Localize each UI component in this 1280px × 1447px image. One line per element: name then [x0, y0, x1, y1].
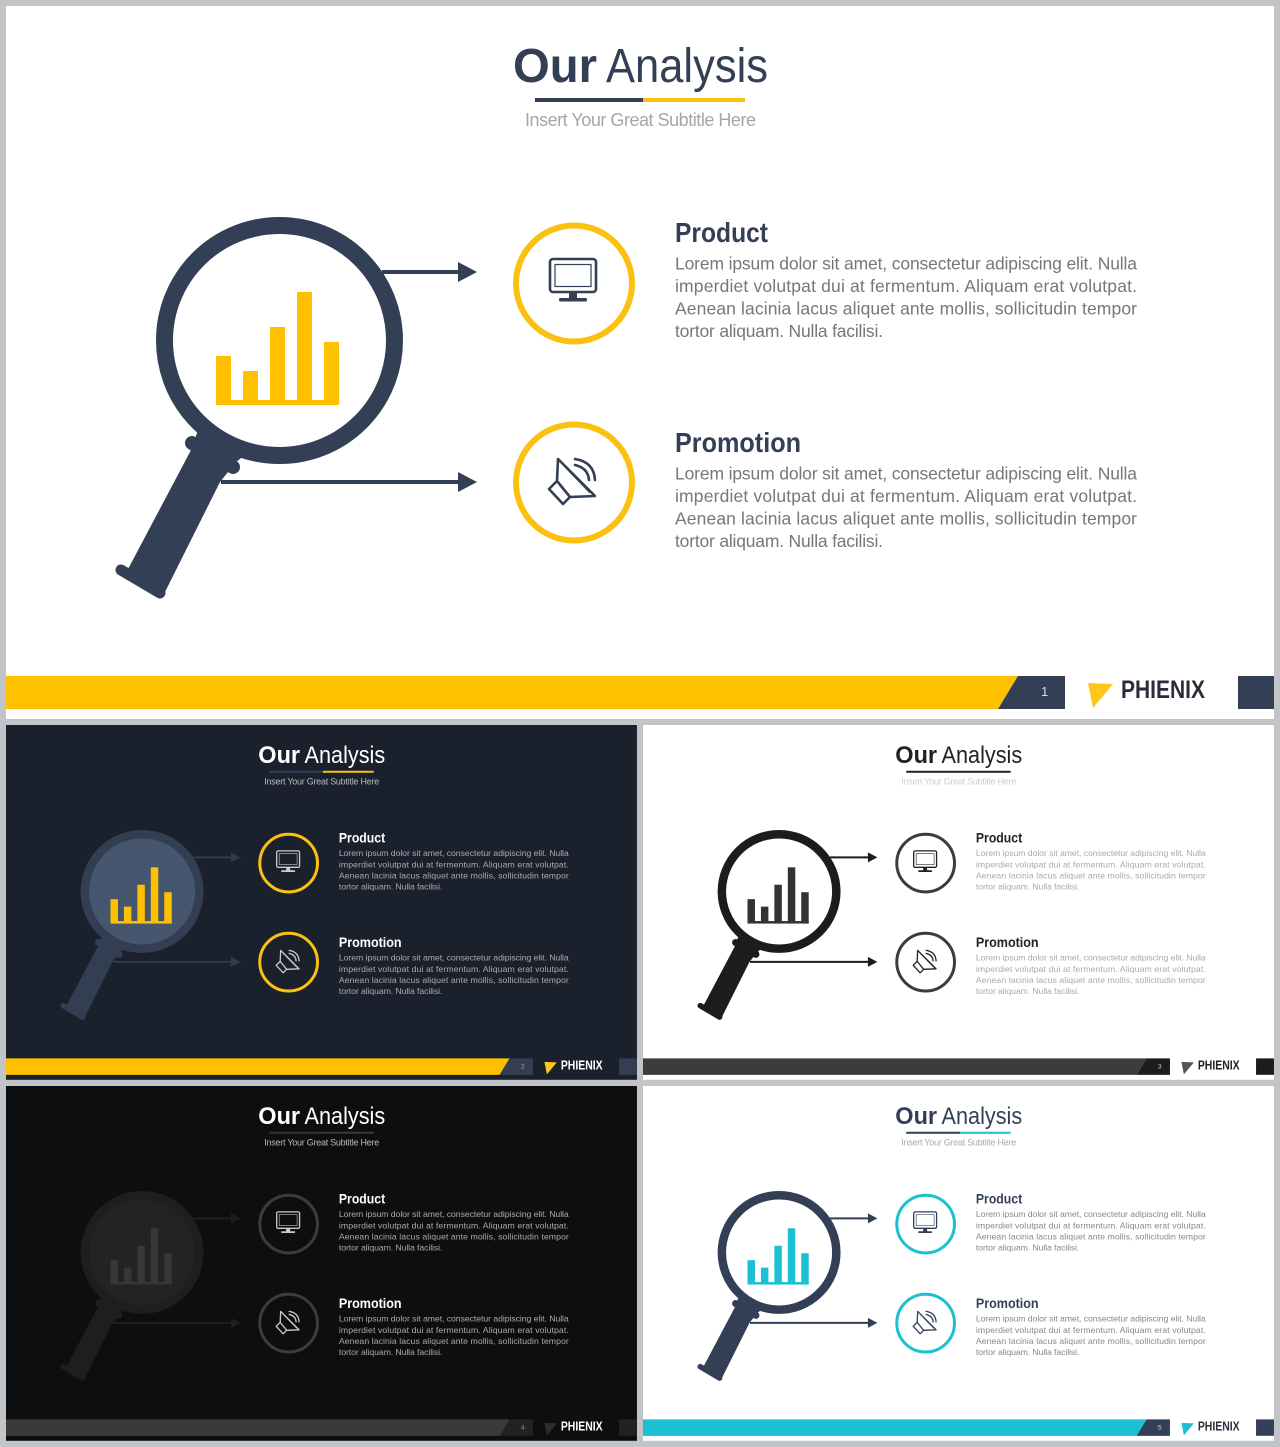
text block: promotion	[976, 953, 1206, 996]
title underline	[269, 1132, 374, 1134]
title: Analysis	[942, 742, 1022, 769]
title: Analysis	[942, 1103, 1022, 1130]
logo: PHIENIX	[1121, 676, 1205, 704]
text block: product	[339, 1209, 569, 1253]
text block: product	[976, 1209, 1206, 1253]
arrow to promotion	[750, 1318, 877, 1328]
icon: speaker in circle	[260, 933, 317, 991]
text block: product: imperdiet volutpat dui at fermentum. Aliquam erat volutpat.	[675, 276, 1137, 296]
title: Our	[895, 1103, 937, 1130]
footer bar	[6, 676, 1274, 709]
text block: product: Lorem ipsum dolor sit amet, consectetur adipiscing elit. Nulla	[976, 848, 1206, 858]
title	[513, 40, 768, 93]
bar chart	[216, 292, 339, 405]
heading: promotion: Promotion	[339, 1295, 402, 1311]
text block: promotion: Aenean lacinia lacus aliquet ante mollis, sollicitudin tempor	[339, 975, 569, 985]
text block: product: Lorem ipsum dolor sit amet, consectetur adipiscing elit. Nulla	[339, 848, 569, 858]
text block: promotion: tortor aliquam. Nulla facilisi.	[976, 986, 1079, 996]
text block: product: Aenean lacinia lacus aliquet ante mollis, sollicitudin tempor	[339, 871, 569, 881]
subtitle: Insert Your Great Subtitle Here	[264, 777, 379, 787]
text block: product: Aenean lacinia lacus aliquet ante mollis, sollicitudin tempor	[339, 1232, 569, 1242]
heading: promotion: Promotion	[339, 934, 402, 950]
logo	[544, 1058, 603, 1074]
heading: product: Product	[675, 217, 768, 248]
title: Our	[513, 40, 597, 93]
magnifying glass	[63, 834, 199, 1017]
text block: product: tortor aliquam. Nulla facilisi.	[339, 1243, 442, 1253]
magnifying glass	[700, 1195, 836, 1378]
footer bar	[6, 1419, 637, 1436]
arrow to promotion	[221, 472, 477, 492]
title underline	[269, 771, 374, 773]
text block: promotion	[976, 1314, 1206, 1357]
text block: product: Aenean lacinia lacus aliquet ante mollis, sollicitudin tempor	[976, 871, 1206, 881]
text block: promotion: imperdiet volutpat dui at fermentum. Aliquam erat volutpat.	[339, 964, 569, 974]
title: Our	[258, 742, 300, 769]
icon: monitor in circle	[260, 1195, 317, 1253]
text block: product: Lorem ipsum dolor sit amet, consectetur adipiscing elit. Nulla	[675, 254, 1137, 274]
page number: 5	[1158, 1424, 1162, 1431]
magnifying glass	[63, 1195, 199, 1378]
arrow to product	[382, 262, 477, 282]
icon: speaker in circle	[897, 933, 954, 991]
arrow to promotion	[113, 957, 240, 967]
subtitle: Insert Your Great Subtitle Here	[525, 110, 756, 130]
logo: PHIENIX	[1198, 1419, 1240, 1433]
title	[895, 742, 1022, 769]
text block: product	[976, 848, 1206, 892]
heading: product: Product	[976, 829, 1022, 845]
footer bar	[6, 1058, 637, 1075]
logo: PHIENIX	[561, 1419, 603, 1433]
title underline	[535, 98, 745, 102]
title: Analysis	[305, 1103, 385, 1130]
icon: speaker in circle	[516, 424, 632, 540]
text block: promotion	[339, 1314, 569, 1357]
slide 2: dark navy theme	[6, 725, 637, 1080]
text block: promotion: Lorem ipsum dolor sit amet, consectetur adipiscing elit. Nulla	[675, 464, 1137, 484]
icon: monitor in circle	[260, 834, 317, 892]
text block: promotion: Lorem ipsum dolor sit amet, consectetur adipiscing elit. Nulla	[976, 1314, 1206, 1324]
text block: promotion: imperdiet volutpat dui at fermentum. Aliquam erat volutpat.	[976, 1325, 1206, 1335]
text block: product: imperdiet volutpat dui at fermentum. Aliquam erat volutpat.	[339, 859, 569, 869]
title: Analysis	[606, 40, 768, 93]
text block: product: Aenean lacinia lacus aliquet ante mollis, sollicitudin tempor	[675, 298, 1137, 318]
text block: promotion: Lorem ipsum dolor sit amet, consectetur adipiscing elit. Nulla	[339, 1314, 569, 1324]
title: Our	[895, 742, 937, 769]
text block: product: imperdiet volutpat dui at fermentum. Aliquam erat volutpat.	[976, 859, 1206, 869]
text block: promotion: tortor aliquam. Nulla facilisi.	[339, 986, 442, 996]
bar chart	[110, 1228, 172, 1285]
arrow to promotion	[750, 957, 877, 967]
text block: promotion: Aenean lacinia lacus aliquet ante mollis, sollicitudin tempor	[339, 1336, 569, 1346]
title underline	[906, 1132, 1011, 1134]
slide 5: white and teal theme	[643, 1086, 1274, 1441]
text block: promotion	[675, 464, 1137, 551]
logo: PHIENIX	[1198, 1058, 1240, 1072]
icon: monitor in circle	[897, 834, 954, 892]
icon: monitor in circle	[516, 226, 632, 342]
arrow to product	[830, 852, 877, 862]
page number: 1	[1041, 684, 1048, 699]
heading: product: Product	[339, 829, 385, 845]
text block: promotion: imperdiet volutpat dui at fermentum. Aliquam erat volutpat.	[675, 486, 1137, 506]
title	[895, 1103, 1022, 1130]
footer bar	[643, 1058, 1274, 1075]
text block: product	[675, 254, 1137, 341]
footer bar	[643, 1419, 1274, 1436]
logo: PHIENIX	[561, 1058, 603, 1072]
title: Analysis	[305, 742, 385, 769]
subtitle: Insert Your Great Subtitle Here	[901, 1138, 1016, 1148]
logo	[1088, 676, 1205, 708]
text block: promotion: Aenean lacinia lacus aliquet ante mollis, sollicitudin tempor	[675, 508, 1137, 528]
slide 3: white and black theme	[643, 725, 1274, 1080]
title	[258, 742, 385, 769]
page number: 4	[521, 1424, 525, 1431]
magnifying glass	[700, 834, 836, 1017]
slide 4: black theme	[6, 1086, 637, 1441]
icon: speaker in circle	[897, 1294, 954, 1352]
text block: promotion: Aenean lacinia lacus aliquet ante mollis, sollicitudin tempor	[976, 1336, 1206, 1346]
text block: promotion: tortor aliquam. Nulla facilisi.	[976, 1347, 1079, 1357]
subtitle: Insert Your Great Subtitle Here	[901, 777, 1016, 787]
magnifying glass	[121, 226, 394, 593]
text block: product: imperdiet volutpat dui at fermentum. Aliquam erat volutpat.	[976, 1220, 1206, 1230]
heading: product: Product	[976, 1190, 1022, 1206]
title	[258, 1103, 385, 1130]
arrow to product	[830, 1213, 877, 1223]
logo	[1181, 1058, 1240, 1074]
text block: product: tortor aliquam. Nulla facilisi.	[339, 882, 442, 892]
text block: promotion: Lorem ipsum dolor sit amet, consectetur adipiscing elit. Nulla	[339, 953, 569, 963]
heading: promotion: Promotion	[976, 934, 1039, 950]
subtitle: Insert Your Great Subtitle Here	[264, 1138, 379, 1148]
text block: product: tortor aliquam. Nulla facilisi.	[675, 321, 883, 341]
text block: product: Lorem ipsum dolor sit amet, consectetur adipiscing elit. Nulla	[339, 1209, 569, 1219]
arrow to promotion	[113, 1318, 240, 1328]
arrow to product	[193, 1213, 240, 1223]
logo	[1181, 1419, 1240, 1435]
text block: product	[339, 848, 569, 892]
text block: promotion: imperdiet volutpat dui at fermentum. Aliquam erat volutpat.	[976, 964, 1206, 974]
text block: promotion: tortor aliquam. Nulla facilisi.	[339, 1347, 442, 1357]
icon: monitor in circle	[897, 1195, 954, 1253]
text block: promotion: Lorem ipsum dolor sit amet, consectetur adipiscing elit. Nulla	[976, 953, 1206, 963]
bar chart	[747, 1228, 809, 1285]
icon: speaker in circle	[260, 1294, 317, 1352]
heading: product: Product	[339, 1190, 385, 1206]
text block: product: Lorem ipsum dolor sit amet, consectetur adipiscing elit. Nulla	[976, 1209, 1206, 1219]
page number: 2	[521, 1063, 525, 1070]
heading: promotion: Promotion	[976, 1295, 1039, 1311]
bar chart	[110, 867, 172, 924]
text block: promotion: imperdiet volutpat dui at fermentum. Aliquam erat volutpat.	[339, 1325, 569, 1335]
title underline	[906, 771, 1011, 773]
heading: promotion: Promotion	[675, 427, 801, 458]
page number: 3	[1158, 1063, 1162, 1070]
bar chart	[747, 867, 809, 924]
text block: product: imperdiet volutpat dui at fermentum. Aliquam erat volutpat.	[339, 1220, 569, 1230]
title: Our	[258, 1103, 300, 1130]
text block: product: Aenean lacinia lacus aliquet ante mollis, sollicitudin tempor	[976, 1232, 1206, 1242]
arrow to product	[193, 852, 240, 862]
text block: promotion: tortor aliquam. Nulla facilisi.	[675, 531, 883, 551]
slide 1: white and yellow theme	[6, 6, 1274, 719]
logo	[544, 1419, 603, 1435]
text block: product: tortor aliquam. Nulla facilisi.	[976, 882, 1079, 892]
text block: promotion	[339, 953, 569, 996]
text block: product: tortor aliquam. Nulla facilisi.	[976, 1243, 1079, 1253]
text block: promotion: Aenean lacinia lacus aliquet ante mollis, sollicitudin tempor	[976, 975, 1206, 985]
